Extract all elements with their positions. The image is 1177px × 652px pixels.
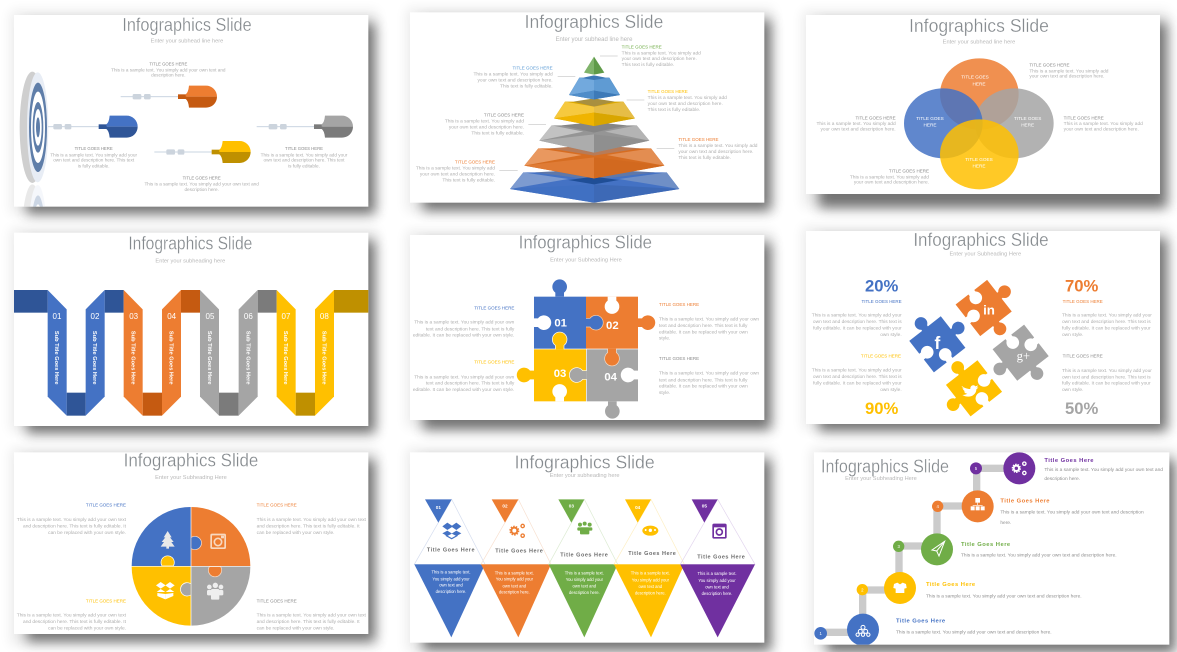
title: Infographics Slide <box>525 11 663 32</box>
step 2: yellow <box>857 572 916 604</box>
text block: step 4: Title Goes Here <box>1000 499 1050 505</box>
puzzle piece: blue facebook: f <box>934 333 940 353</box>
step 1: blue <box>814 614 879 646</box>
step 4: orange <box>932 490 994 522</box>
ribbon: orange <box>124 290 200 416</box>
title: Infographics Slide <box>124 449 258 470</box>
quadrant: yellow <box>132 567 191 626</box>
column 03: green: 03 <box>569 503 574 508</box>
text block: blue: This is a sample text. You simply add your own text <box>17 517 127 523</box>
text block: step 4: here. <box>1000 520 1011 526</box>
text block: grey: TITLE GOES HERE <box>1063 354 1103 359</box>
text block: orange: and description here. This text is fully editable. It <box>257 523 360 529</box>
text block: green: This is a sample text. You simply add <box>622 50 701 56</box>
text block: top right: your own text and description here. <box>1029 74 1104 80</box>
circle: orange <box>940 58 1019 130</box>
piece numbers: 03 <box>554 368 566 380</box>
ribbon sub titles: Sub Title Goes Here <box>206 331 212 384</box>
ribbon sub titles: Sub Title Goes Here <box>282 331 288 384</box>
circle labels: TITLE GOES <box>1014 116 1041 121</box>
text block: yellow: This is a sample text. You simply add <box>648 95 727 101</box>
column 02: orange: own text and <box>503 583 527 588</box>
text block: orange: TITLE GOES HERE <box>659 302 699 307</box>
text block: top right: TITLE GOES HERE <box>1029 63 1069 68</box>
panel: dart target slide <box>10 10 384 224</box>
text block: yellow: can be replaced with your own style. <box>48 625 126 631</box>
text block: grey: own text and description here. This text is <box>1062 374 1151 380</box>
text block: grey: TITLE GOES HERE <box>484 113 524 118</box>
text block: orange dart: This is a sample text. You simply add your own text and <box>111 67 226 72</box>
text block: orange right: TITLE GOES HERE <box>678 137 718 142</box>
circle labels: TITLE GOES <box>916 116 944 121</box>
text block: orange: own text and description here. This text is <box>1062 319 1151 325</box>
piece numbers: 02 <box>606 320 619 332</box>
text block: blue: editable. It can be replaced with your own style. <box>413 333 514 339</box>
column 01: blue: description here. <box>436 589 466 594</box>
icon: yellow dart <box>154 141 251 163</box>
knob: yellow into blue <box>161 556 174 566</box>
ribbon chart <box>14 290 368 416</box>
text block: step 1: Title Goes Here <box>896 618 946 624</box>
step 5: purple <box>970 452 1035 484</box>
text block: orange dart: description here. <box>151 73 186 78</box>
layer: green tip <box>584 57 604 75</box>
text block: grey: TITLE GOES HERE <box>659 356 699 361</box>
column 02: orange: description here. <box>499 590 530 595</box>
knob: blue into orange <box>191 536 202 550</box>
subheading: Enter your subhead line here <box>943 40 1015 46</box>
text block: yellow: and description here. This text is fully editable. It <box>23 619 127 625</box>
text block: light blue: your own text and description here. <box>478 77 553 83</box>
ribbon numbers: 06 <box>244 312 253 321</box>
icon: blue dart <box>48 116 138 138</box>
text block: grey: editable. It can be replaced with your own <box>659 384 748 390</box>
title: Infographics Slide <box>821 455 949 476</box>
text block: bottom: TITLE GOES HERE <box>889 169 929 174</box>
text block: left: This is a sample text. You simply add <box>816 121 896 127</box>
text block: right: This is a sample text. You simply add <box>1064 121 1143 127</box>
text block: orange: editable. It can be replaced with your own <box>659 330 748 336</box>
icon: instagram <box>712 524 727 539</box>
column 02: orange <box>481 499 551 637</box>
circle labels: TITLE GOES <box>961 75 989 80</box>
ribbon sub titles: Sub Title Goes Here <box>53 331 59 384</box>
icon: team <box>642 526 658 536</box>
step 3: green <box>893 533 953 565</box>
icon: dropbox <box>156 582 175 599</box>
text block: orange left: TITLE GOES HERE <box>455 159 495 164</box>
column 03: green: Title Goes Here <box>560 552 608 558</box>
text block: blue dart: is fully editable. <box>78 163 110 168</box>
knob: orange into grey <box>208 567 222 577</box>
text block: yellow: TITLE GOES HERE <box>648 89 688 94</box>
text block: blue: TITLE GOES HERE <box>862 299 902 304</box>
icon: paper plane <box>932 541 945 556</box>
text block: green: This text is fully editable. <box>622 62 674 68</box>
step 1: blue: 1 <box>819 631 822 636</box>
subheading: Enter your subheading here <box>550 473 620 479</box>
icon: orange dart <box>121 86 217 108</box>
text block: yellow: This is a sample text. You simply add your <box>812 368 902 374</box>
text block: green: TITLE GOES HERE <box>622 44 662 49</box>
text block: blue: and description here. This text is fully editable. It <box>23 523 127 529</box>
column 05: purple: 05 <box>702 504 707 509</box>
ribbon numbers: 01 <box>53 312 62 321</box>
text block: light blue: TITLE GOES HERE <box>513 65 553 70</box>
text block: grey: This is a sample text. You simply add your own <box>659 371 759 377</box>
layer: yellow <box>554 98 635 126</box>
puzzle piece: grey google plus <box>982 325 1057 399</box>
circle labels: HERE <box>924 123 936 128</box>
ribbon numbers <box>53 312 329 321</box>
ribbon numbers: 04 <box>167 312 177 321</box>
text block: grey: and description here. This text is fully editable. It <box>257 619 360 625</box>
text block: grey dart: This is a sample text. You simply add your <box>261 152 348 157</box>
layer: blue base <box>510 169 679 203</box>
piece numbers: 01 <box>554 318 567 330</box>
icon: instagram <box>210 534 226 549</box>
staircase connector <box>822 468 1019 632</box>
ribbon numbers: 07 <box>282 312 291 321</box>
text block: orange right: your own text and description here. <box>678 149 753 155</box>
column 05: purple: You simply add your <box>698 578 736 583</box>
column 02: orange: You simply add your <box>496 577 534 582</box>
statistic: 70%: 70% <box>1065 276 1099 295</box>
icon: people <box>893 583 907 593</box>
text block: blue: TITLE GOES HERE <box>86 503 126 508</box>
icon: people <box>577 522 592 534</box>
text block: blue: can be replaced with your own style. <box>48 530 126 536</box>
text block: step 3: This is a sample text. You simply add your own text and description here. <box>961 553 1117 559</box>
text block: grey dart: own text and description here. This text <box>264 158 345 163</box>
text block: orange right: This is a sample text. You simply add <box>678 143 758 149</box>
circular puzzle chart <box>132 507 250 626</box>
panel: steps timeline slide <box>811 448 1177 652</box>
subheading: Enter your Subheading Here <box>550 257 622 263</box>
text block: yellow: This is a sample text. You simply add your own text <box>17 613 127 619</box>
column 02: orange: Title Goes Here <box>495 549 543 555</box>
text block: bottom: your own text and description here. <box>854 180 929 186</box>
step 2: yellow: 2 <box>861 587 864 592</box>
text block: grey dart: is fully editable. <box>288 163 320 168</box>
circle labels: HERE <box>973 82 985 87</box>
text block: step 2: This is a sample text. You simply add your own text and description here. <box>926 593 1082 599</box>
step 4: orange: 4 <box>936 504 939 509</box>
icon: hierarchy <box>971 498 985 510</box>
column 02: orange: This is a sample text. <box>495 570 534 575</box>
column 04: yellow: 04 <box>635 505 641 510</box>
subheading: Enter your Subheading Here <box>155 475 227 481</box>
text block: blue: This is a sample text. You simply add your own <box>414 320 515 326</box>
text block: yellow: text and description here. This text is fully <box>426 381 515 387</box>
puzzle piece: orange linkedin: in <box>983 303 995 318</box>
ribbon: grey <box>200 290 277 416</box>
text block: left: your own text and description here. <box>821 126 896 132</box>
title: Infographics Slide <box>128 233 252 254</box>
ribbon numbers: 08 <box>320 312 329 321</box>
text block: yellow: TITLE GOES HERE <box>86 598 126 603</box>
icon: cubes <box>856 625 870 636</box>
text block: blue: own text and description here. This text is <box>813 319 902 325</box>
text block: blue: This is a sample text. You simply add your <box>812 313 902 319</box>
text block: grey: This text is fully editable. <box>471 131 524 137</box>
panel: circle puzzle slide <box>11 448 377 645</box>
text block: blue dart: This is a sample text. You simply add your <box>50 152 137 157</box>
ribbon sub titles <box>53 331 326 384</box>
title: Infographics Slide <box>913 229 1049 250</box>
text block: blue: fully editable. It can be replaced with your <box>813 326 902 332</box>
circle: yellow <box>940 119 1019 189</box>
column 04: yellow: This is a sample text. <box>631 571 670 576</box>
circle labels: HERE <box>1021 123 1034 128</box>
text block: orange left: This text is fully editable. <box>442 177 495 183</box>
text block: grey: fully editable. It can be replaced with your <box>1062 381 1151 387</box>
icon: tree <box>161 531 175 549</box>
puzzle piece: orange linkedin <box>956 272 1030 346</box>
text block: orange: own style. <box>1062 332 1083 338</box>
text block: yellow: own text and description here. This text is <box>813 374 902 380</box>
piece: orange 02 <box>586 297 655 349</box>
text block: step 5: Title Goes Here <box>1044 458 1094 464</box>
text block: grey: This is a sample text. You simply add your own text <box>257 613 367 619</box>
text block: yellow: editable. It can be replaced with your own style. <box>413 387 514 393</box>
text block: right: TITLE GOES HERE <box>1064 115 1104 120</box>
panel: layered pyramid slide <box>407 8 773 212</box>
text block: grey dart: TITLE GOES HERE <box>285 146 323 151</box>
text block: right: your own text and description here. <box>1064 126 1139 132</box>
column 05: purple: description here. <box>702 591 732 596</box>
column 05: purple <box>680 499 755 637</box>
statistic: 20%: 20% <box>865 276 899 295</box>
text block: orange: TITLE GOES HERE <box>1063 299 1103 304</box>
text block: grey: TITLE GOES HERE <box>257 598 297 603</box>
text block: yellow dart: This is a sample text. You simply add your own text and <box>144 182 259 187</box>
text block: orange: This is a sample text. You simply add your own text <box>257 517 367 523</box>
piece numbers <box>554 318 619 384</box>
puzzle piece: grey google plus: g+ <box>1017 349 1030 363</box>
column 01: blue: Title Goes Here <box>427 547 475 553</box>
circle: grey <box>975 88 1054 158</box>
text block: orange: This is a sample text. You simply add your <box>1062 313 1152 319</box>
text block: orange: style. <box>659 336 670 342</box>
text block: step 5: description here. <box>1044 476 1080 482</box>
text block: blue dart: TITLE GOES HERE <box>75 146 113 151</box>
title: Infographics Slide <box>519 232 652 253</box>
statistic: 90%: 90% <box>865 399 899 418</box>
circle labels: TITLE GOES <box>965 157 993 162</box>
text block: blue: own style. <box>880 332 902 338</box>
text block: orange: fully editable. It can be replaced with your <box>1062 326 1151 332</box>
ribbon: blue <box>14 290 124 416</box>
column 02: orange: 02 <box>502 504 508 509</box>
ribbon sub titles: Sub Title Goes Here <box>91 331 97 384</box>
column 03: green: description here. <box>569 590 600 595</box>
piece numbers: 04 <box>604 372 618 384</box>
ribbon numbers: 05 <box>206 312 215 321</box>
layer: orange <box>524 145 664 178</box>
title: Infographics Slide <box>515 451 655 472</box>
title: Infographics Slide <box>909 15 1049 36</box>
icon: dartboard target <box>20 72 48 207</box>
icon: dropbox <box>442 523 461 539</box>
text block: grey: can be replaced with your own style. <box>257 625 334 631</box>
text block: light blue: This text is fully editable. <box>500 83 553 89</box>
column 01: blue: This is a sample text. <box>431 570 471 575</box>
column 05: purple: own text and <box>705 584 729 589</box>
icon: gears <box>1012 462 1026 475</box>
quadrant: blue <box>132 507 191 566</box>
text block: yellow: TITLE GOES HERE <box>861 354 901 359</box>
ribbon sub titles: Sub Title Goes Here <box>244 331 250 384</box>
text block: orange left: This is a sample text. You simply add <box>416 165 495 171</box>
text block: orange left: your own text and description here. <box>420 171 495 177</box>
puzzle piece: yellow twitter <box>928 350 1002 424</box>
knob: grey into yellow <box>180 583 191 596</box>
text block: grey: This is a sample text. You simply add <box>445 119 524 125</box>
piece: grey 04 <box>569 349 638 419</box>
ribbon sub titles: Sub Title Goes Here <box>168 331 174 384</box>
column 01: blue: You simply add your <box>432 576 470 581</box>
text block: orange dart: TITLE GOES HERE <box>149 61 188 66</box>
column 04: yellow: Title Goes Here <box>628 551 676 557</box>
column 05: purple: Title Goes Here <box>697 554 745 560</box>
layer: light blue <box>569 75 620 99</box>
panel: ribbon slide <box>11 228 377 433</box>
panel: social puzzle slide <box>803 227 1169 431</box>
jigsaw chart <box>517 279 655 419</box>
subheading: Enter your subheading here <box>155 258 225 264</box>
venn diagram <box>904 58 1054 189</box>
ribbon numbers: 02 <box>91 312 100 321</box>
text block: orange: text and description here. This text is fully <box>659 323 748 329</box>
column 01: blue <box>414 499 485 637</box>
step 3: green: 3 <box>897 544 900 549</box>
column 03: green: You simply add your <box>566 577 604 582</box>
text block: orange: This is a sample text. You simply add your own <box>659 317 759 323</box>
title: Infographics Slide <box>122 14 252 35</box>
text block: blue dart: own text and description here. This text <box>53 158 135 163</box>
subheading: Enter your subhead line here <box>556 37 633 43</box>
text block: grey: text and description here. This text is fully <box>659 377 748 383</box>
text block: step 4: This is a sample text. You simply add your own text and description <box>1000 510 1144 516</box>
subheading: Enter your Subheading Here <box>845 476 917 482</box>
text block: blue: text and description here. This text is fully <box>426 326 515 332</box>
icon: gears <box>510 524 524 537</box>
column 03: green: This is a sample text. <box>565 570 604 575</box>
text block: yellow: fully editable. It can be replaced with your <box>813 380 902 386</box>
column 01: blue: 01 <box>436 505 441 510</box>
text block: grey: This is a sample text. You simply add your <box>1062 368 1152 374</box>
column 04: yellow: description here. <box>635 590 666 595</box>
panel: jigsaw slide <box>407 231 773 430</box>
ribbon sub titles: Sub Title Goes Here <box>320 331 326 384</box>
text block: grey: your own text and description here. <box>449 125 524 131</box>
icon: grey dart <box>257 116 353 138</box>
icon: people <box>207 583 223 600</box>
text block: step 3: Title Goes Here <box>961 542 1011 548</box>
text block: yellow: your own text and description here. <box>648 101 723 107</box>
column 03: green: own text and <box>573 584 597 589</box>
step 5: purple: 5 <box>975 466 978 471</box>
text block: grey: own style. <box>1062 387 1083 393</box>
text block: step 5: This is a sample text. You simply add your own text and <box>1044 467 1163 473</box>
subheading: Enter your subhead line here <box>151 39 223 45</box>
panel: triangles slide <box>407 448 773 652</box>
puzzle piece: blue facebook <box>901 298 976 372</box>
circle: blue <box>904 88 983 158</box>
pyramid chart <box>510 57 679 203</box>
text block: yellow dart: description here. <box>184 187 219 192</box>
text block: light blue: This is a sample text. You simply add <box>473 71 553 77</box>
text block: bottom: This is a sample text. You simply add <box>850 174 929 180</box>
piece: blue 01 <box>534 279 586 349</box>
layer: grey <box>539 122 649 153</box>
text block: grey: style. <box>659 390 670 396</box>
text block: step 2: Title Goes Here <box>926 582 976 588</box>
ribbon numbers: 03 <box>129 312 139 321</box>
panel: venn diagram slide <box>803 11 1169 208</box>
text block: orange: can be replaced with your own style. <box>257 530 334 536</box>
text block: top right: This is a sample text. You simply add <box>1029 68 1109 74</box>
quadrant: grey <box>191 567 250 626</box>
column 03: green <box>549 499 618 637</box>
text block: yellow: own style. <box>880 387 902 393</box>
column 04: yellow <box>614 499 684 637</box>
quadrant: orange <box>191 507 250 566</box>
ribbon sub titles: Sub Title Goes Here <box>130 331 136 384</box>
subheading: Enter your Subheading Here <box>949 251 1021 257</box>
ribbon: yellow <box>277 290 368 416</box>
statistic: 50%: 50% <box>1065 399 1099 418</box>
text block: yellow: TITLE GOES HERE <box>474 360 514 365</box>
text block: blue: TITLE GOES HERE <box>474 305 514 310</box>
text block: yellow dart: TITLE GOES HERE <box>183 176 221 181</box>
column 01: blue: own text and <box>439 583 463 588</box>
text block: yellow: This is a sample text. You simply add your own <box>414 374 515 380</box>
column 04: yellow: own text and <box>639 584 663 589</box>
column 04: yellow: You simply add your <box>632 577 670 582</box>
column 05: purple: This is a sample text. <box>697 571 737 576</box>
piece: yellow 03 <box>517 332 586 401</box>
circle labels: HERE <box>973 164 985 169</box>
arrows: pyramid leader lines <box>499 56 674 171</box>
text block: orange: TITLE GOES HERE <box>257 503 297 508</box>
text block: left: TITLE GOES HERE <box>856 115 896 120</box>
text block: green: your own text and description here. <box>622 56 697 62</box>
text block: yellow: This text is fully editable. <box>648 107 700 113</box>
text block: orange right: This text is fully editable. <box>678 155 731 161</box>
text block: step 1: This is a sample text. You simply add your own text and description here. <box>896 629 1052 635</box>
